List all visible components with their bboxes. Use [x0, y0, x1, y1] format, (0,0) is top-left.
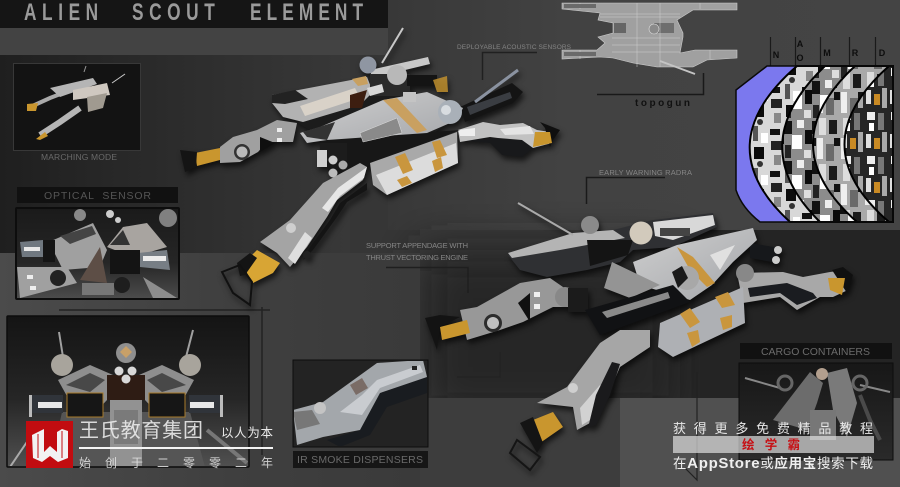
labels: early warning radra: EARLY WARNING RADRA	[599, 168, 692, 177]
panel: optical sensor	[16, 187, 179, 299]
left arm	[425, 278, 588, 350]
panel: texture maps: A	[797, 39, 804, 49]
promo block	[673, 421, 874, 472]
topogun wireframe: topogun	[635, 98, 690, 109]
panel: optical sensor: OPTICAL SENSOR	[44, 190, 151, 202]
panel: texture maps: N	[773, 50, 779, 60]
main hull	[604, 228, 757, 300]
line: leader below ship	[457, 352, 697, 480]
panel: cargo containers	[739, 343, 893, 460]
lower arm	[222, 163, 367, 305]
panel: texture maps: D	[879, 48, 886, 58]
undercarriage	[320, 130, 460, 177]
panel: IR smoke dispensers	[293, 360, 428, 468]
rear body	[272, 28, 462, 142]
dark arm box	[585, 285, 690, 335]
engine pods	[750, 243, 782, 264]
lower arm	[510, 330, 650, 470]
left arm	[180, 120, 297, 172]
labels: support appendage: THRUST VECTORING ENGINE	[366, 253, 468, 262]
title	[0, 0, 388, 28]
title: ELEMENT	[250, 0, 363, 26]
labels: support appendage: SUPPORT APPENDAGE WITH	[366, 241, 468, 250]
right arm rear	[458, 122, 560, 157]
labels: deployable acoustic sensors: DEPLOYABLE ACOUSTIC SENSORS	[457, 44, 572, 51]
topogun wireframe	[562, 3, 737, 109]
logo block	[26, 419, 273, 470]
cargo box	[658, 287, 745, 357]
panel: cargo containers: CARGO CONTAINERS	[761, 346, 870, 358]
panel: marching mode	[14, 64, 140, 162]
cargo box	[370, 132, 458, 195]
promo block: 获得更多免费精品教程	[673, 421, 873, 436]
hex cluster	[317, 143, 348, 178]
logo block: 以人为本	[221, 426, 273, 440]
rear body	[508, 203, 717, 277]
panel: IR smoke dispensers: IR SMOKE DISPENSERS	[297, 454, 423, 466]
panel: texture maps	[736, 37, 893, 222]
panel: front view	[7, 316, 249, 467]
panel: texture maps: M	[823, 48, 831, 58]
right arm	[736, 264, 853, 310]
logo block: 始创于二零零二年	[79, 456, 273, 470]
labels: early warning radra	[586, 168, 692, 204]
ship: upper view	[180, 28, 560, 305]
ship: lower view	[425, 203, 853, 470]
line: front view leader	[59, 307, 270, 455]
title: SCOUT	[132, 0, 215, 26]
main hull	[300, 92, 463, 143]
logo block: 王氏教育集团	[79, 419, 203, 442]
promo block: 在AppStore或应用宝搜索下载	[673, 455, 873, 472]
promo block: 绘学霸	[742, 437, 800, 452]
labels: deployable acoustic sensors	[457, 44, 572, 80]
panel: texture maps: R	[852, 48, 859, 58]
panel: texture maps: O	[796, 53, 804, 63]
labels: support appendage	[366, 241, 468, 293]
right antenna arm	[460, 70, 523, 122]
panel: marching mode: MARCHING MODE	[41, 152, 117, 162]
title: ALIEN	[24, 0, 98, 26]
